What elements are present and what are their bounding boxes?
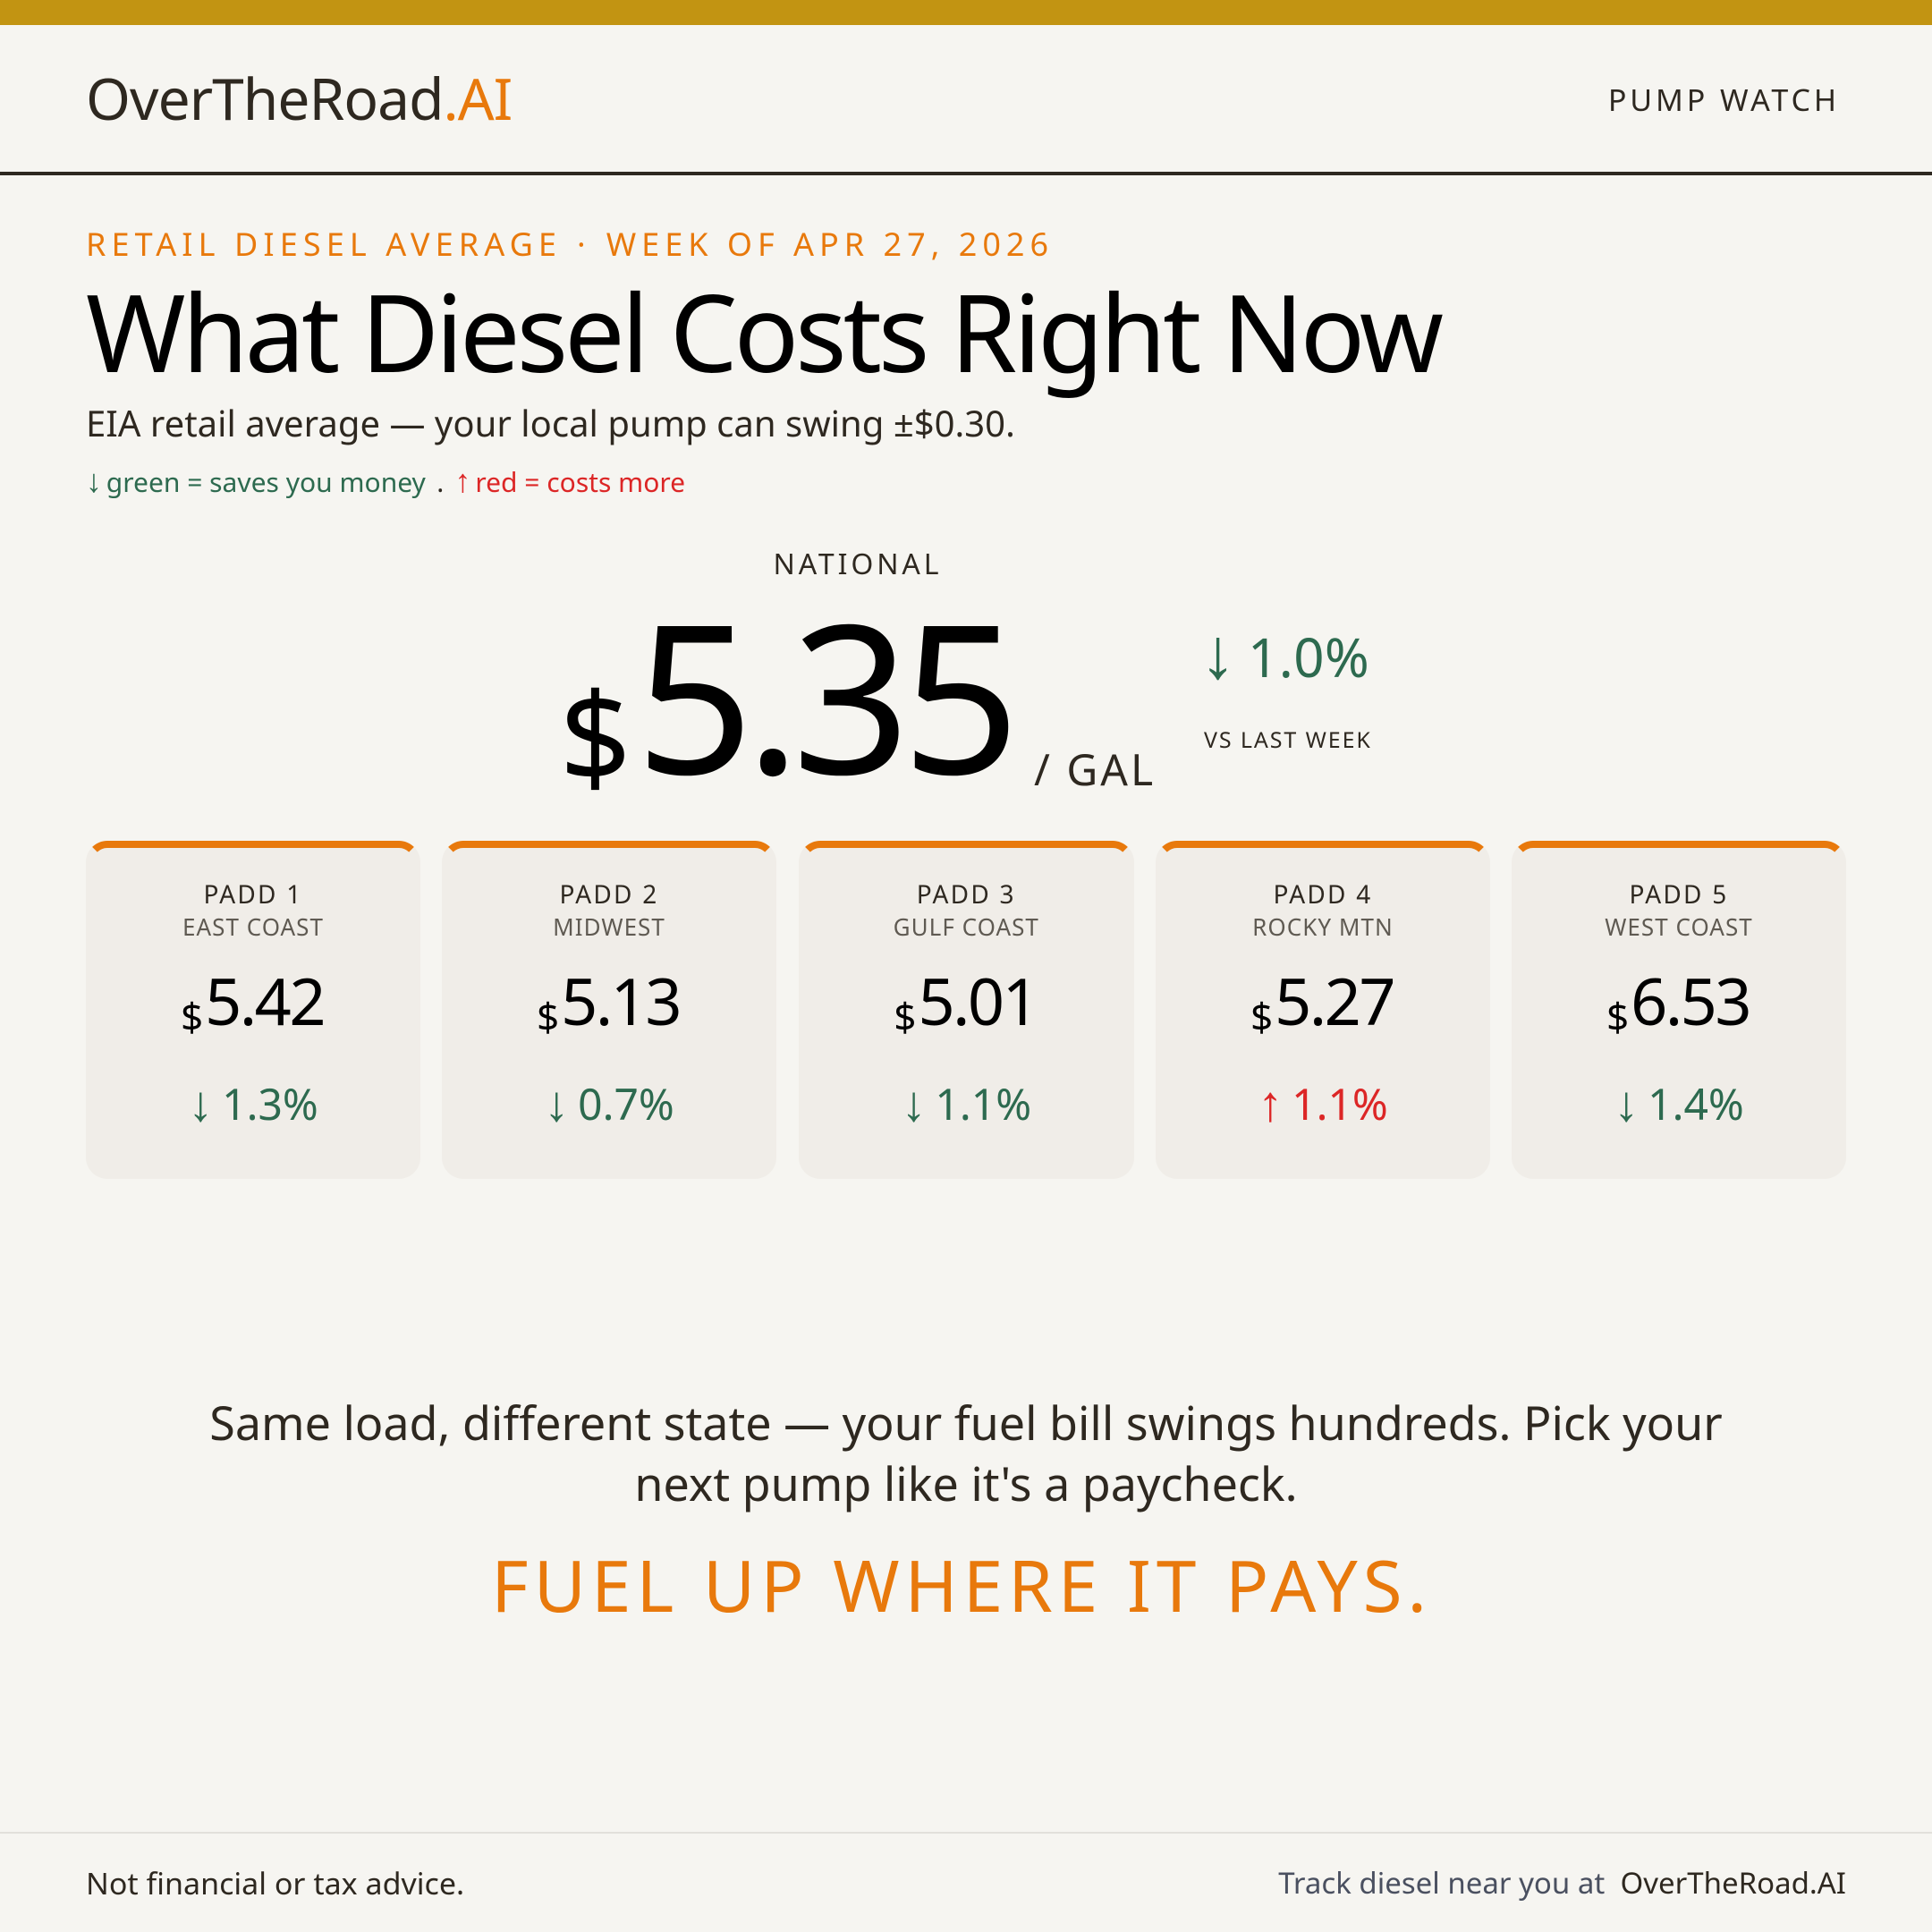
region area: MIDWEST: [553, 911, 665, 943]
national price block: [560, 545, 1372, 835]
region area: GULF COAST: [894, 911, 1039, 943]
call to action: FUEL UP WHERE IT PAYS.: [491, 1535, 1432, 1633]
region price: $5.13: [537, 957, 680, 1045]
region area: ROCKY MTN: [1252, 911, 1394, 943]
region area: WEST COAST: [1605, 911, 1753, 943]
comparison label: VS LAST WEEK: [1204, 724, 1372, 755]
region change: ↓ 1.1%: [901, 1068, 1031, 1136]
region name: PADD 3: [917, 877, 1016, 911]
closing message: Same load, different state — your fuel bill swings hundreds. Pick your: [209, 1391, 1723, 1454]
region price: $6.53: [1606, 957, 1750, 1045]
closing message: [209, 1391, 1723, 1515]
region change: ↓ 1.3%: [188, 1068, 318, 1136]
top accent bar: [0, 0, 1932, 25]
region change: ↑ 1.1%: [1258, 1068, 1388, 1136]
closing message: next pump like it's a paycheck.: [634, 1452, 1298, 1515]
region change: ↓ 1.4%: [1614, 1068, 1744, 1136]
subtitle: EIA retail average — your local pump can swing ±$0.30.: [86, 398, 1015, 447]
per gallon unit: / GAL: [1034, 741, 1156, 799]
title: What Diesel Costs Right Now: [86, 258, 1440, 404]
national change: ↓ 1.0%: [1200, 601, 1369, 699]
region price: $5.27: [1250, 957, 1394, 1045]
footer link: Track diesel near you at OverTheRoad.AI: [1278, 1862, 1846, 1902]
eyebrow: RETAIL DIESEL AVERAGE · WEEK OF APR 27, 2026: [86, 222, 1054, 266]
panel: PADD 3: [799, 841, 1134, 1179]
region change: ↓ 0.7%: [544, 1068, 674, 1136]
section label: PUMP WATCH: [1608, 79, 1840, 120]
region name: PADD 4: [1273, 877, 1373, 911]
region area: EAST COAST: [182, 911, 324, 943]
national label: NATIONAL: [774, 545, 942, 583]
colour legend: ↓ green = saves you money . ↑ red = costs more: [86, 458, 685, 502]
header: [0, 25, 1932, 175]
national price: $5.35: [560, 553, 1012, 835]
region price: $5.42: [181, 957, 324, 1045]
panel: PADD 2: [442, 841, 776, 1179]
disclaimer: Not financial or tax advice.: [86, 1862, 464, 1903]
panel: PADD 4: [1156, 841, 1490, 1179]
region price: $5.01: [894, 957, 1037, 1045]
region name: PADD 1: [203, 877, 303, 911]
footer: [0, 1832, 1932, 1932]
panel: PADD 5: [1512, 841, 1846, 1179]
logo: OverTheRoad.AI: [86, 59, 512, 137]
region name: PADD 2: [559, 877, 659, 911]
panel: PADD 1: [86, 841, 420, 1179]
region name: PADD 5: [1629, 877, 1729, 911]
